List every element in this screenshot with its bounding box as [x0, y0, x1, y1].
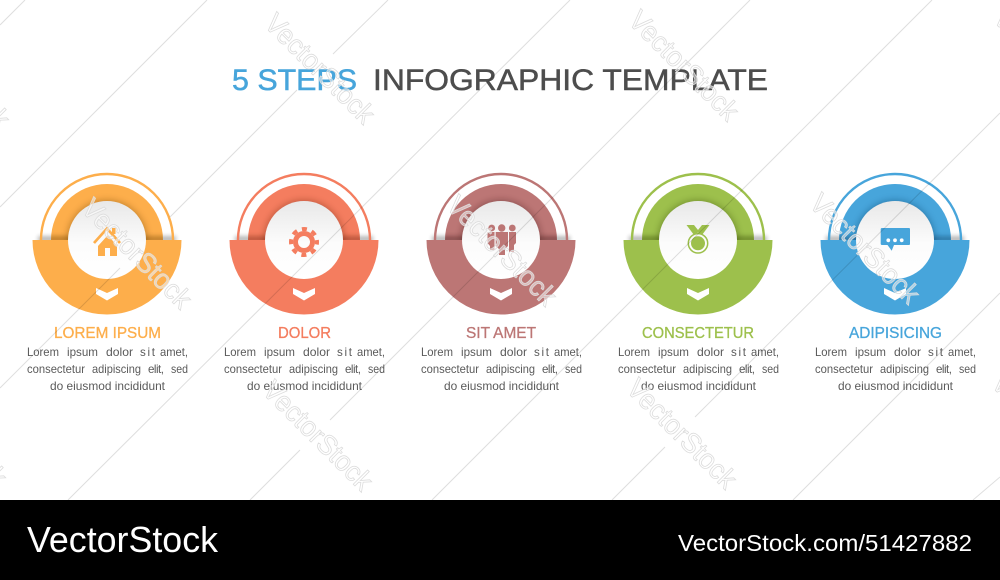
description: amet,	[357, 346, 385, 359]
description: sit	[928, 346, 944, 359]
description: dolor	[697, 346, 724, 359]
heading: SIT AMET	[466, 325, 536, 342]
step 2: dolor	[224, 174, 385, 393]
description: elit,	[936, 363, 952, 376]
description: amet,	[751, 346, 779, 359]
description: Lorem	[618, 346, 650, 359]
icon: chevron	[96, 288, 118, 300]
description: Lorem	[224, 346, 256, 359]
watermarks: VectorStock	[76, 192, 199, 315]
description: adipiscing	[92, 363, 141, 376]
badge 3	[426, 174, 576, 314]
icon: chevron	[293, 288, 315, 300]
description	[815, 346, 976, 393]
icon: chevron	[687, 288, 709, 300]
heading: ADIPISICING	[849, 325, 942, 342]
description: consectetur	[27, 363, 85, 376]
description: ipsum	[855, 346, 886, 359]
description: sed	[565, 363, 582, 376]
description: adipiscing	[289, 363, 338, 376]
description: consectetur	[618, 363, 676, 376]
step 3: sit amet	[421, 174, 582, 393]
badge 2	[230, 174, 378, 314]
description: consectetur	[224, 363, 282, 376]
description: do eiusmod incididunt	[444, 380, 560, 393]
description: adipiscing	[880, 363, 929, 376]
description: dolor	[303, 346, 330, 359]
watermarks: VectorStock	[621, 372, 744, 495]
description: dolor	[894, 346, 921, 359]
watermarks: VectorStock	[257, 374, 380, 497]
icon: medal	[686, 225, 710, 253]
title	[232, 64, 768, 97]
description: Lorem	[27, 346, 59, 359]
footer logo: VectorStock	[27, 519, 219, 560]
badge 5	[820, 174, 970, 314]
icon: chevron	[884, 288, 906, 300]
description: sed	[171, 363, 188, 376]
watermarks: VectorStock	[259, 7, 382, 130]
description: sed	[959, 363, 976, 376]
description: adipiscing	[683, 363, 732, 376]
description: sit	[337, 346, 353, 359]
step 5: adipisicing	[815, 174, 976, 393]
title highlight: 5 STEPS: 5 STEPS	[232, 64, 357, 97]
description	[421, 346, 582, 393]
description: sed	[368, 363, 385, 376]
description: sed	[762, 363, 779, 376]
step 1: lorem ipsum	[27, 174, 188, 393]
watermarks: VectorStock	[804, 187, 927, 310]
description: dolor	[106, 346, 133, 359]
icon: gear	[291, 229, 317, 255]
description: ipsum	[67, 346, 98, 359]
icon: chat bubble	[881, 228, 910, 251]
description: Lorem	[421, 346, 453, 359]
description: amet,	[948, 346, 976, 359]
description	[27, 346, 188, 393]
footer url: VectorStock.com/51427882	[678, 530, 972, 556]
description: consectetur	[421, 363, 479, 376]
badge 1	[32, 174, 182, 314]
description: sit	[534, 346, 550, 359]
description: do eiusmod incididunt	[838, 380, 954, 393]
description: sit	[731, 346, 747, 359]
description: ipsum	[264, 346, 295, 359]
description	[224, 346, 385, 393]
description: ipsum	[461, 346, 492, 359]
description	[618, 346, 779, 393]
description: do eiusmod incididunt	[247, 380, 363, 393]
description: dolor	[500, 346, 527, 359]
title main: INFOGRAPHIC TEMPLATE: INFOGRAPHIC TEMPLATE	[373, 64, 768, 97]
icon: people	[488, 224, 516, 255]
badge 4	[624, 174, 772, 314]
step 4: consectetur	[618, 174, 779, 393]
description: amet,	[160, 346, 188, 359]
description: consectetur	[815, 363, 873, 376]
footer bar	[0, 500, 1000, 580]
description: sit	[140, 346, 156, 359]
description: amet,	[554, 346, 582, 359]
watermarks: VectorStock	[441, 189, 564, 312]
heading: DOLOR	[278, 325, 331, 342]
description: adipiscing	[486, 363, 535, 376]
description: elit,	[148, 363, 164, 376]
description: do eiusmod incididunt	[50, 380, 166, 393]
watermarks: VectorStock	[623, 4, 746, 127]
description: ipsum	[658, 346, 689, 359]
icon: house	[94, 228, 120, 256]
description: elit,	[739, 363, 755, 376]
heading: CONSECTETUR	[642, 325, 754, 342]
icon: chevron	[490, 288, 512, 300]
heading: LOREM IPSUM	[54, 325, 161, 342]
description: Lorem	[815, 346, 847, 359]
description: do eiusmod incididunt	[641, 380, 757, 393]
description: elit,	[345, 363, 361, 376]
description: elit,	[542, 363, 558, 376]
